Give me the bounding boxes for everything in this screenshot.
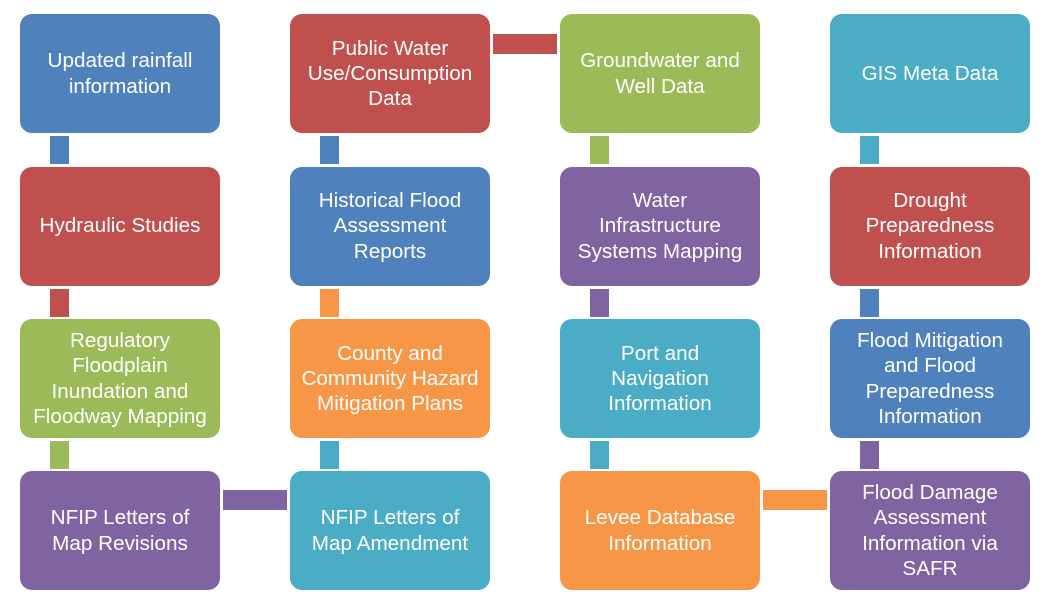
connector: Public Water to Groundwater	[493, 34, 557, 54]
box: Public Water Use/Consumption Data: Data	[368, 87, 412, 110]
box: Flood Mitigation and Flood Preparedness Information: and Flood	[884, 354, 976, 377]
box: Groundwater and Well Data: Groundwater and	[580, 49, 740, 72]
box: Historical Flood Assessment Reports: Assessment	[334, 214, 446, 237]
box: Public Water Use/Consumption Data	[290, 14, 490, 133]
box: Levee Database Information: Information	[608, 532, 712, 554]
box: Drought Preparedness Information: Drought	[893, 189, 967, 212]
connector: Levee Database to Flood Damage	[763, 490, 827, 510]
box: Public Water Use/Consumption Data: Public Water	[332, 37, 448, 60]
box: Water Infrastructure Systems Mapping: Water	[633, 189, 687, 212]
box: Port and Navigation Information: Navigation	[611, 367, 709, 390]
box: NFIP Letters of Map Amendment: NFIP Letters of	[321, 506, 459, 529]
box: Port and Navigation Information: Information	[608, 392, 712, 415]
box: Flood Damage Assessment Information via SAFR: SAFR	[902, 557, 958, 580]
connector: column 3 row 3 to 4	[590, 441, 609, 469]
connector: column 4 row 1 to 2	[860, 136, 879, 164]
box: Regulatory Floodplain Inundation and Floodway Mapping: Floodplain	[72, 354, 168, 377]
box: GIS Meta Data	[830, 14, 1030, 133]
box: Port and Navigation Information: Port and	[621, 342, 699, 365]
box: Flood Mitigation and Flood Preparedness Information	[830, 319, 1030, 438]
connector: NFIP Revisions to NFIP Amendment	[223, 490, 287, 510]
box: Levee Database Information	[560, 471, 760, 590]
box: County and Community Hazard Mitigation Plans	[290, 319, 490, 438]
box: Port and Navigation Information	[560, 319, 760, 438]
box: Hydraulic Studies: Hydraulic Studies	[40, 214, 200, 237]
connector: column 1 row 3 to 4	[50, 441, 69, 469]
box: Flood Damage Assessment Information via SAFR: Assessment	[874, 506, 986, 529]
box: Historical Flood Assessment Reports: Historical Flood	[319, 189, 461, 212]
box: Water Infrastructure Systems Mapping	[560, 166, 760, 286]
box: County and Community Hazard Mitigation Plans: Community Hazard	[301, 367, 479, 390]
box: Updated rainfall information: information	[69, 74, 171, 98]
box: County and Community Hazard Mitigation Plans: County and	[337, 342, 443, 365]
box: Drought Preparedness Information: Information	[878, 240, 982, 263]
connector: column 3 row 1 to 2	[590, 136, 609, 164]
box: Drought Preparedness Information	[830, 166, 1030, 286]
box: Historical Flood Assessment Reports	[290, 166, 490, 286]
box: Updated rainfall information: Updated rainfall	[48, 49, 192, 72]
connector: column 4 row 2 to 3	[860, 288, 879, 316]
connector: column 4 row 3 to 4	[860, 441, 879, 469]
box: Updated rainfall information	[20, 14, 220, 133]
box: NFIP Letters of Map Revisions	[20, 471, 220, 590]
box: Regulatory Floodplain Inundation and Floodway Mapping: Floodway Mapping	[33, 405, 207, 428]
box: NFIP Letters of Map Amendment	[290, 471, 490, 590]
box: NFIP Letters of Map Revisions: NFIP Letters of	[51, 506, 189, 529]
box: NFIP Letters of Map Revisions: Map Revisions	[52, 532, 188, 554]
box: Regulatory Floodplain Inundation and Floodway Mapping: Regulatory	[70, 329, 170, 352]
box: GIS Meta Data: GIS Meta Data	[862, 62, 998, 85]
connector: column 1 row 2 to 3	[50, 288, 69, 316]
box: Flood Mitigation and Flood Preparedness Information: Preparedness	[866, 380, 994, 402]
box: Water Infrastructure Systems Mapping: Systems Mapping	[578, 240, 742, 263]
box: Hydraulic Studies	[20, 166, 220, 286]
box: Flood Damage Assessment Information via SAFR	[830, 471, 1030, 590]
box: Drought Preparedness Information: Preparedness	[866, 214, 994, 237]
connector: column 2 row 2 to 3	[320, 288, 339, 316]
box: Regulatory Floodplain Inundation and Floodway Mapping: Inundation and	[52, 380, 188, 402]
box: Flood Mitigation and Flood Preparedness Information: Flood Mitigation	[857, 329, 1003, 352]
box: Public Water Use/Consumption Data: Use/Consumption	[308, 62, 472, 85]
connector: column 2 row 3 to 4	[320, 441, 339, 469]
box: Groundwater and Well Data	[560, 14, 760, 133]
box: Historical Flood Assessment Reports: Reports	[354, 240, 426, 263]
box: Water Infrastructure Systems Mapping: Infrastructure	[599, 214, 721, 237]
box: Flood Damage Assessment Information via SAFR: Information via	[862, 532, 998, 554]
box: Flood Mitigation and Flood Preparedness Information: Information	[878, 405, 982, 428]
connector: column 1 row 1 to 2	[50, 136, 69, 164]
box: Levee Database Information: Levee Database	[585, 506, 735, 529]
connector: column 2 row 1 to 2	[320, 136, 339, 164]
connector: column 3 row 2 to 3	[590, 288, 609, 316]
box: Groundwater and Well Data: Well Data	[615, 74, 705, 98]
box: Flood Damage Assessment Information via SAFR: Flood Damage	[862, 481, 998, 504]
box: Regulatory Floodplain Inundation and Floodway Mapping	[20, 319, 220, 438]
box: County and Community Hazard Mitigation Plans: Mitigation Plans	[317, 392, 463, 415]
box: NFIP Letters of Map Amendment: Map Amendment	[312, 532, 468, 554]
